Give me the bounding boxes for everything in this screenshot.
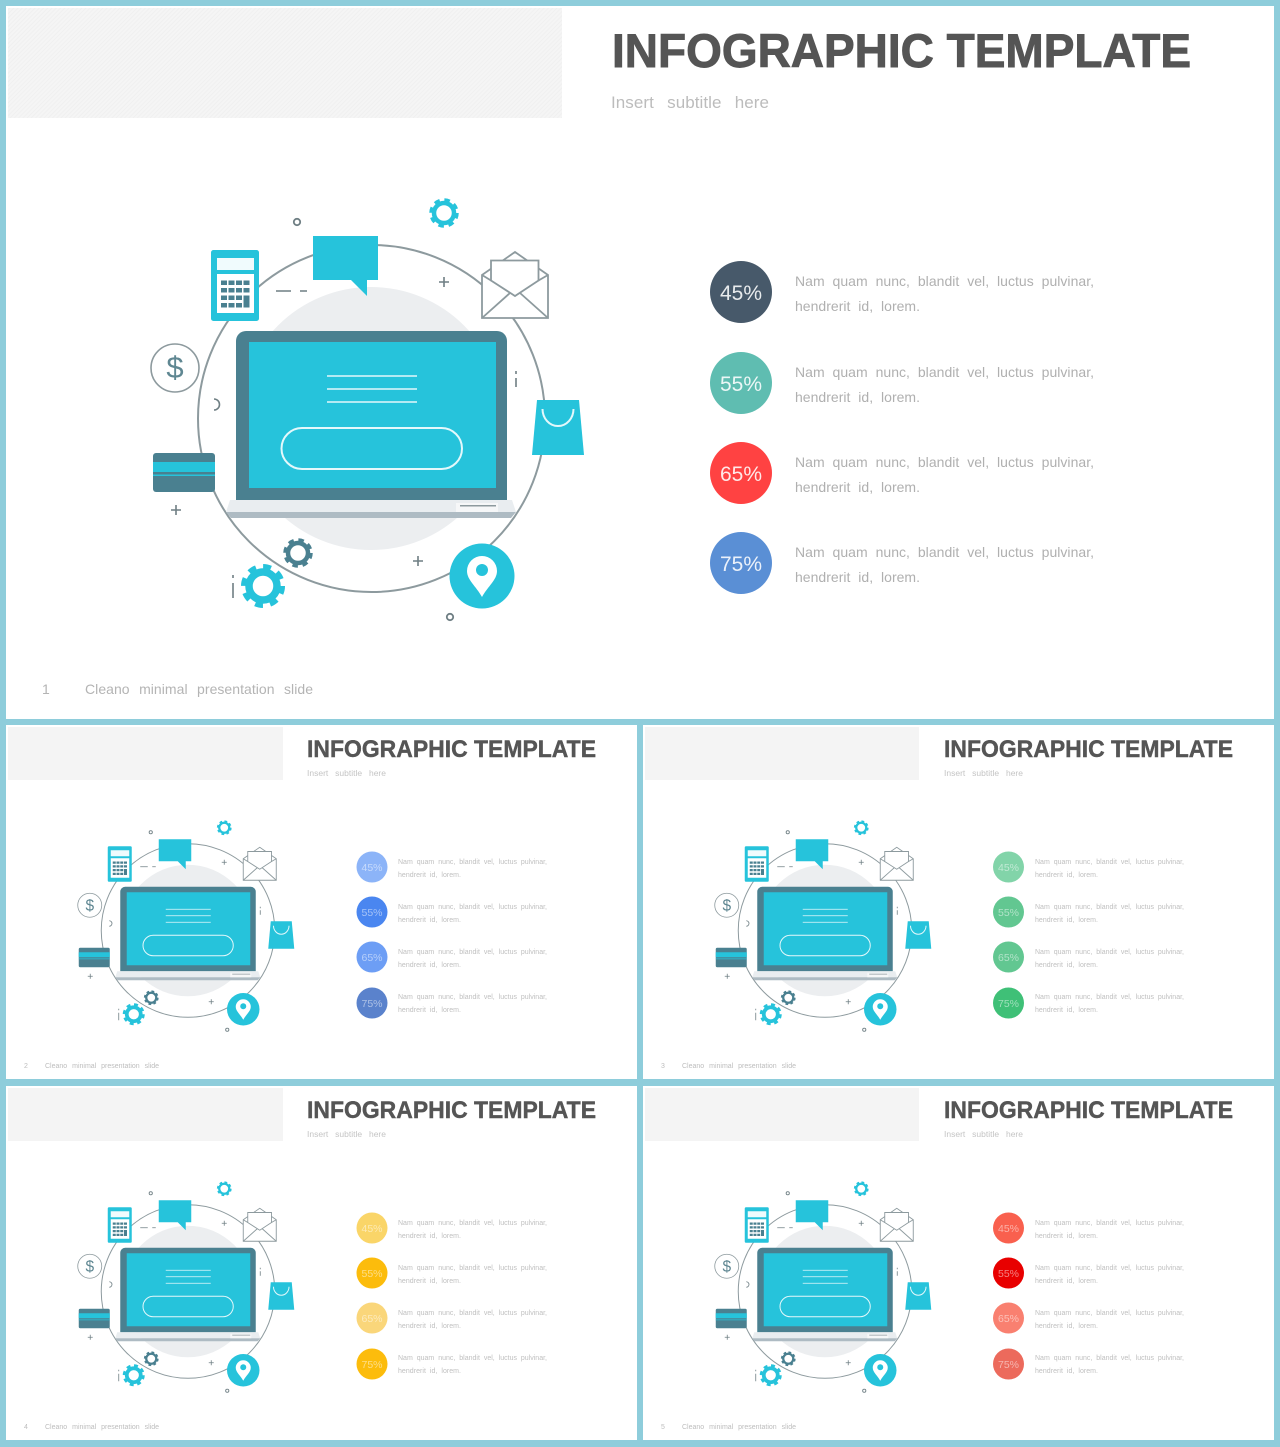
footer: Cleano minimal presentation slide	[85, 681, 313, 697]
icon: laptop	[226, 331, 516, 518]
data list: Nam quam nunc, blandit vel, luctus pulvinar,	[1035, 1220, 1184, 1227]
data list: Nam quam nunc, blandit vel, luctus pulvinar,	[1035, 904, 1184, 911]
icon: dollar coin: $	[166, 350, 184, 385]
item 45%	[710, 261, 1094, 323]
illustration	[715, 1182, 931, 1392]
illustration: laptop with icons	[151, 200, 584, 620]
data list: 45%	[998, 1223, 1019, 1235]
data list: Nam quam nunc, blandit vel, luctus pulvinar,	[398, 1265, 547, 1272]
title: INFOGRAPHIC TEMPLATE	[944, 736, 1233, 763]
icon: credit card	[153, 453, 215, 492]
subtitle: Insert subtitle here	[307, 1129, 386, 1139]
data list	[993, 852, 1184, 1018]
orbit ring	[198, 245, 545, 592]
subtitle: Insert subtitle here	[611, 93, 769, 112]
data list: hendrerit id, lorem.	[398, 917, 461, 924]
data list: hendrerit id, lorem.	[1035, 872, 1098, 879]
data list: hendrerit id, lorem.	[1035, 917, 1098, 924]
decorative marks	[171, 219, 516, 620]
panel: slide 4 yellow	[6, 1086, 637, 1440]
data list: 65%	[998, 952, 1019, 964]
subtitle: Insert subtitle here	[944, 1129, 1023, 1139]
icon: dollar coin	[151, 344, 199, 392]
footer: 1	[42, 681, 50, 697]
data list	[356, 1212, 547, 1380]
header grey block	[8, 8, 562, 118]
item 55%: Nam quam nunc, blandit vel, luctus pulvinar,	[795, 364, 1094, 380]
illustration	[78, 1182, 294, 1392]
data list: Nam quam nunc, blandit vel, luctus pulvinar,	[398, 1355, 547, 1362]
icon: dark gear	[285, 540, 311, 566]
footer: Cleano minimal presentation slide	[682, 1063, 796, 1070]
data list: 75%	[361, 1359, 383, 1371]
data list	[993, 1212, 1184, 1380]
data list: main slide	[710, 261, 1094, 594]
data list: hendrerit id, lorem.	[1035, 1368, 1098, 1375]
data list: 45%	[361, 1223, 383, 1235]
item 65%: 65%	[720, 463, 762, 486]
item 65%: hendrerit id, lorem.	[795, 479, 920, 495]
icon: speech bubble	[313, 236, 378, 296]
data list: Nam quam nunc, blandit vel, luctus pulvinar,	[398, 994, 547, 1001]
data list: Nam quam nunc, blandit vel, luctus pulvinar,	[398, 1220, 547, 1227]
footer: 2	[24, 1063, 28, 1070]
item 75%	[710, 532, 1094, 594]
subtitle: Insert subtitle here	[307, 768, 386, 778]
data list: Nam quam nunc, blandit vel, luctus pulvinar,	[1035, 1310, 1184, 1317]
data list: Nam quam nunc, blandit vel, luctus pulvinar,	[398, 1310, 547, 1317]
data list: hendrerit id, lorem.	[398, 962, 461, 969]
data list: Nam quam nunc, blandit vel, luctus pulvinar,	[398, 904, 547, 911]
data list: Nam quam nunc, blandit vel, luctus pulvinar,	[1035, 1265, 1184, 1272]
title: INFOGRAPHIC TEMPLATE	[307, 1097, 596, 1124]
item 75%: 75%	[720, 553, 762, 576]
icon: location pin	[450, 544, 514, 608]
data list: hendrerit id, lorem.	[398, 1368, 461, 1375]
icon: large teal gear	[244, 566, 282, 606]
footer: Cleano minimal presentation slide	[682, 1424, 796, 1431]
data list: 55%	[361, 907, 383, 919]
title: INFOGRAPHIC TEMPLATE	[944, 1097, 1233, 1124]
data list: 45%	[361, 862, 383, 874]
panel: slide 2 blue	[6, 725, 637, 1079]
data list: hendrerit id, lorem.	[398, 872, 461, 879]
data list: hendrerit id, lorem.	[398, 1323, 461, 1330]
header grey block	[8, 1088, 283, 1141]
item 55%	[710, 352, 1094, 414]
header grey block	[645, 727, 919, 780]
data list: 75%	[998, 1359, 1019, 1371]
data list: hendrerit id, lorem.	[1035, 1233, 1098, 1240]
illustration	[715, 821, 931, 1031]
item 75%: Nam quam nunc, blandit vel, luctus pulvinar,	[795, 544, 1094, 560]
data list: 65%	[361, 952, 383, 964]
data list: 55%	[361, 1268, 383, 1280]
data list: 65%	[361, 1313, 383, 1325]
data list: 45%	[998, 862, 1019, 874]
item 45%: hendrerit id, lorem.	[795, 298, 920, 314]
data list: hendrerit id, lorem.	[1035, 962, 1098, 969]
panel: slide 5 red	[643, 1086, 1274, 1440]
data list: hendrerit id, lorem.	[1035, 1007, 1098, 1014]
data list: Nam quam nunc, blandit vel, luctus pulvinar,	[398, 859, 547, 866]
data list	[356, 852, 547, 1018]
footer: Cleano minimal presentation slide	[45, 1063, 159, 1070]
data list: hendrerit id, lorem.	[1035, 1278, 1098, 1285]
item 45%: Nam quam nunc, blandit vel, luctus pulvinar,	[795, 273, 1094, 289]
header grey block	[645, 1088, 919, 1141]
item 55%: 55%	[720, 373, 762, 396]
icon: shopping bag	[532, 400, 584, 455]
data list: 65%	[998, 1313, 1019, 1325]
icon: top teal gear	[431, 200, 457, 226]
data list: 75%	[361, 998, 383, 1010]
data list: hendrerit id, lorem.	[398, 1007, 461, 1014]
data list: hendrerit id, lorem.	[398, 1233, 461, 1240]
title: INFOGRAPHIC TEMPLATE	[307, 736, 596, 763]
panel: slide 3 green	[643, 725, 1274, 1079]
data list: 75%	[998, 998, 1019, 1010]
header grey block	[8, 727, 283, 780]
data list: Nam quam nunc, blandit vel, luctus pulvinar,	[1035, 1355, 1184, 1362]
data list: 55%	[998, 1268, 1019, 1280]
subtitle: Insert subtitle here	[944, 768, 1023, 778]
footer: Cleano minimal presentation slide	[45, 1424, 159, 1431]
icon: envelope	[482, 252, 548, 318]
item 65%	[710, 442, 1094, 504]
data list: Nam quam nunc, blandit vel, luctus pulvinar,	[1035, 994, 1184, 1001]
grey backdrop circle	[240, 287, 502, 550]
data list: hendrerit id, lorem.	[398, 1278, 461, 1285]
footer: 5	[661, 1424, 665, 1431]
title: INFOGRAPHIC TEMPLATE	[612, 25, 1191, 78]
item 65%: Nam quam nunc, blandit vel, luctus pulvinar,	[795, 454, 1094, 470]
item 55%: hendrerit id, lorem.	[795, 389, 920, 405]
data list: Nam quam nunc, blandit vel, luctus pulvinar,	[398, 949, 547, 956]
icon: calculator	[211, 250, 259, 321]
item 75%: hendrerit id, lorem.	[795, 569, 920, 585]
data list: hendrerit id, lorem.	[1035, 1323, 1098, 1330]
item 45%: 45%	[720, 282, 762, 305]
footer: 3	[661, 1063, 665, 1070]
data list: Nam quam nunc, blandit vel, luctus pulvinar,	[1035, 949, 1184, 956]
illustration	[78, 821, 294, 1031]
data list: 55%	[998, 907, 1019, 919]
panel: main slide	[6, 6, 1274, 719]
data list: Nam quam nunc, blandit vel, luctus pulvinar,	[1035, 859, 1184, 866]
footer: 4	[24, 1424, 28, 1431]
